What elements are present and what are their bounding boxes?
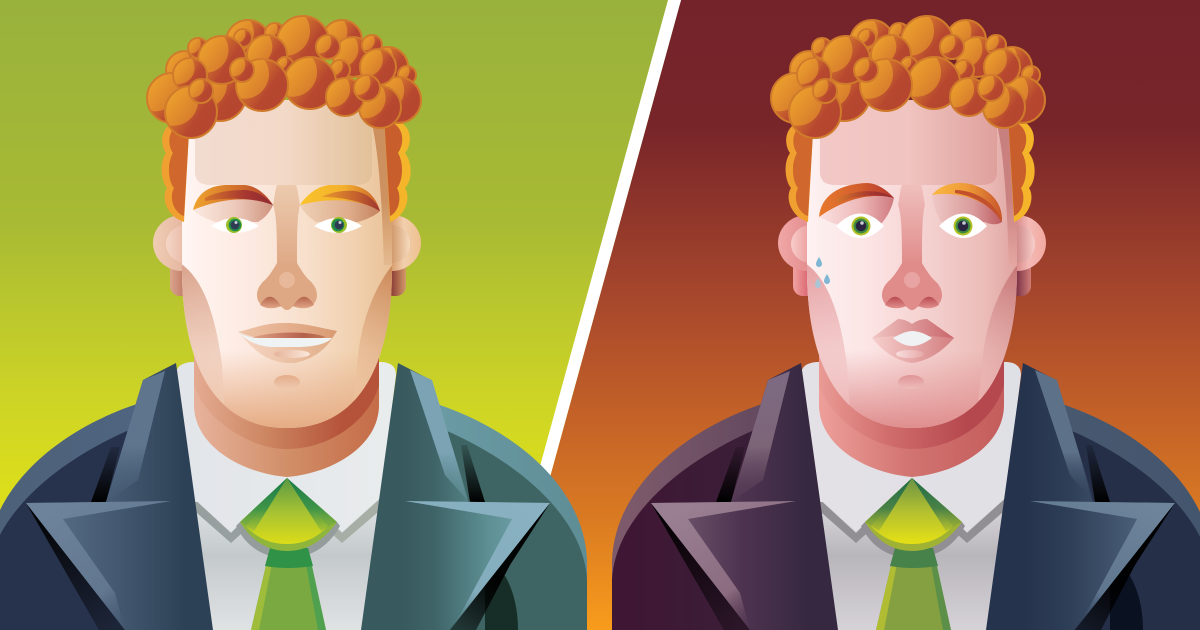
open mouth	[872, 319, 954, 363]
neck	[819, 350, 1004, 477]
tears	[815, 257, 830, 288]
ears	[778, 215, 1046, 296]
eye sockets and nose bridge	[193, 185, 380, 264]
nose	[257, 263, 317, 310]
curly hair	[755, 6, 1045, 222]
shirt	[801, 362, 1021, 630]
figure: calm man	[0, 6, 587, 630]
left eye	[211, 217, 259, 233]
jacket	[612, 404, 1200, 630]
curly hair	[131, 6, 421, 222]
jacket	[0, 404, 587, 630]
right eye	[939, 214, 987, 238]
background: green panel	[0, 0, 680, 630]
white diagonal divider	[495, 0, 681, 630]
head	[795, 100, 1019, 430]
left eyebrow	[819, 183, 894, 217]
neck	[194, 350, 379, 477]
chin dimple	[898, 375, 924, 389]
background: red to orange panel	[508, 0, 1200, 630]
lapels	[651, 363, 1175, 630]
nose	[882, 263, 942, 310]
left eyebrow	[193, 185, 273, 210]
shirt	[176, 362, 396, 630]
smiling mouth	[238, 323, 337, 363]
right eye	[314, 217, 362, 233]
left eye	[836, 214, 884, 238]
ears	[153, 215, 421, 296]
chin dimple	[274, 375, 300, 389]
lapels	[26, 363, 550, 630]
head	[170, 100, 394, 430]
right eyebrow	[300, 185, 380, 211]
eye sockets and nose bridge	[819, 185, 1002, 264]
right eyebrow	[932, 183, 1002, 222]
necktie	[236, 478, 340, 630]
necktie	[861, 478, 965, 630]
figure: nervous man	[612, 6, 1200, 630]
